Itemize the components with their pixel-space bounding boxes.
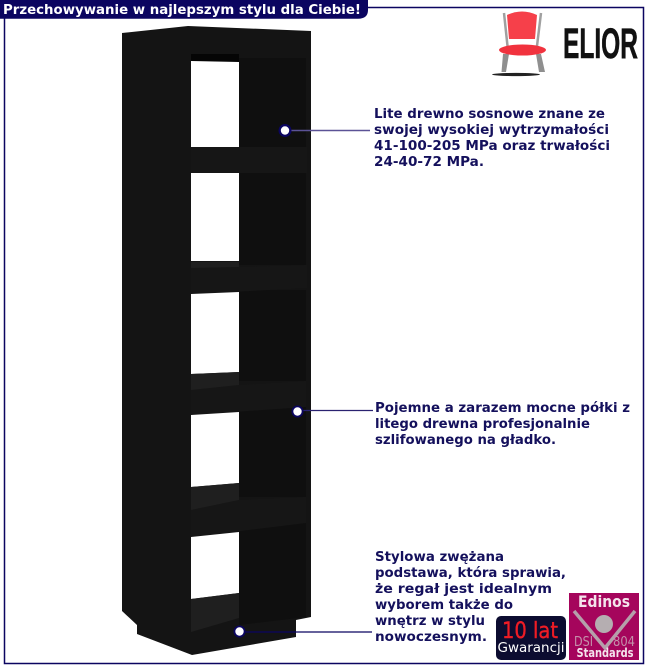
badge: 10 year warranty: 10 lat [502, 619, 558, 644]
callout line: base [245, 631, 372, 633]
callout dot: wood [278, 124, 292, 137]
badge: Edinos standards: 804 [613, 635, 635, 650]
badge: 10 year warranty: Gwarancji [498, 641, 564, 656]
text block: base: wnętrz w stylu [375, 613, 485, 629]
text block: shelves: Pojemne a zarazem mocne półki z [375, 400, 630, 416]
text block: base: podstawa, która sprawia, [375, 565, 566, 581]
text block: wood: swojej wysokiej wytrzymałości [374, 122, 609, 138]
text block: base: nowoczesnym. [375, 629, 487, 645]
badge: Edinos standards: Standards [576, 646, 634, 660]
title banner: Przechowywanie w najlepszym stylu dla Ciebie! [3, 3, 361, 18]
bookshelf [122, 26, 311, 655]
shelf openings [191, 61, 239, 599]
text block: shelves [375, 400, 630, 448]
text block: wood: 41-100-205 MPa oraz trwałości [374, 138, 610, 154]
text block: base [375, 549, 566, 645]
text block: shelves: szlifowanego na gładko. [375, 432, 556, 448]
text block: wood: 24-40-72 MPa. [374, 154, 484, 170]
inner shelf tops [191, 262, 239, 632]
badge: 10 year warranty [496, 616, 566, 660]
badge: Edinos standards: Edinos [578, 592, 630, 611]
callout line: shelves [303, 410, 373, 412]
callout dot: base [234, 626, 246, 638]
callout line: wood [291, 130, 370, 132]
text block: wood [374, 106, 610, 170]
text block: base: wyborem także do [375, 597, 513, 613]
badge: Edinos standards: DSI [574, 635, 593, 650]
shelf underside shadow [191, 54, 239, 62]
badge: Edinos standards [569, 592, 639, 660]
shelf back panel shading [239, 58, 306, 625]
text block: wood: Lite drewno sosnowe znane ze [374, 106, 605, 122]
text block: shelves: litego drewna profesjonalnie [375, 416, 590, 432]
callout dot: shelves [292, 406, 304, 418]
shelf boards [191, 147, 307, 537]
text block: base: Stylowa zwężana [375, 549, 504, 565]
icon: red chair [492, 12, 546, 76]
text block: base: że regał jest idealnym [375, 581, 552, 597]
